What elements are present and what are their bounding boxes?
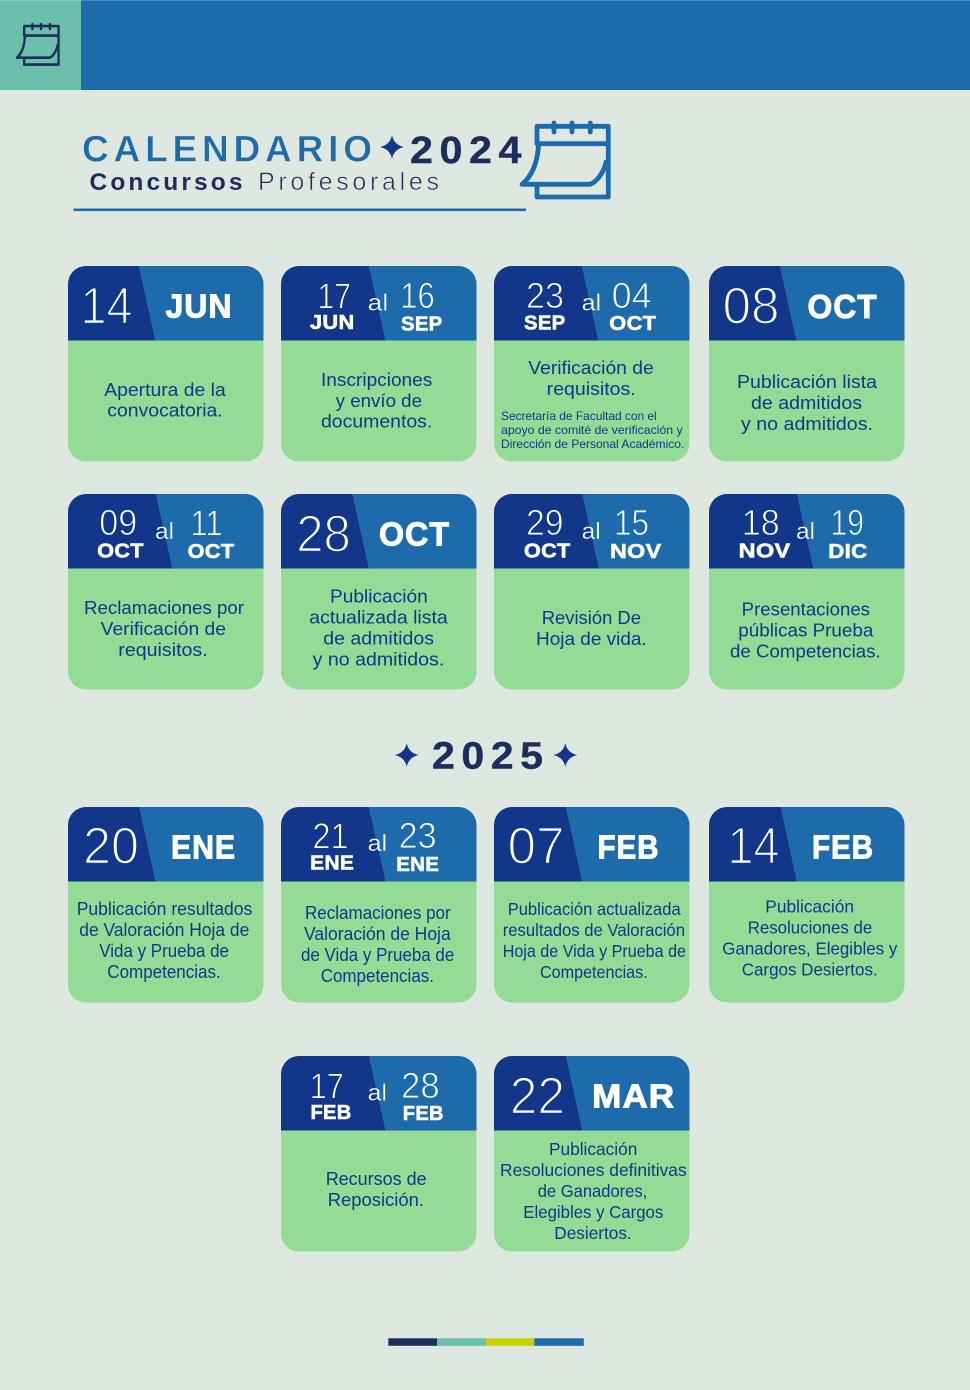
card: 29 OCT al 15 NOV: [494, 494, 690, 690]
date: 14: [80, 277, 132, 335]
description: Ganadores, Elegibles y: [722, 938, 898, 958]
date: 11: [190, 503, 222, 544]
date: al: [582, 518, 601, 544]
description: [309, 585, 448, 669]
date: [310, 1065, 444, 1125]
date: MAR: [592, 1078, 675, 1115]
date: [728, 818, 874, 876]
date: al: [796, 518, 815, 544]
card: 23 SEP al 04 OCT: [494, 266, 690, 462]
description: y no admitidos.: [313, 648, 444, 669]
description: resultados de Valoración: [503, 920, 685, 940]
date: al: [368, 290, 388, 316]
description: [730, 599, 881, 662]
date: OCT: [379, 517, 450, 554]
description: Apertura de la: [104, 379, 226, 400]
date: al: [368, 1080, 387, 1106]
date: al: [155, 518, 174, 544]
date: al: [368, 830, 387, 856]
description: de admitidos: [751, 392, 862, 413]
card: 07 FEB: [494, 807, 690, 1002]
description: [84, 597, 244, 660]
date: ENE: [171, 829, 236, 866]
description: Hoja de vida.: [536, 628, 647, 649]
date: SEP: [401, 312, 442, 335]
date: FEB: [812, 829, 874, 866]
description: Cargos Desiertos.: [742, 959, 878, 979]
description: Vida y Prueba de: [99, 940, 229, 961]
date: 21: [312, 815, 348, 856]
description: Competencias.: [107, 961, 221, 982]
date: [508, 818, 660, 876]
date: 19: [830, 502, 864, 543]
description: requisitos.: [547, 378, 636, 399]
date: [524, 502, 662, 563]
date: NOV: [739, 540, 791, 563]
description: Verificación de: [101, 618, 226, 639]
date: 18: [742, 502, 780, 543]
date: [722, 277, 878, 335]
date: 09: [99, 502, 137, 543]
description: documentos.: [321, 411, 432, 432]
description: [301, 902, 454, 986]
description: [104, 379, 226, 421]
description: Presentaciones: [742, 599, 870, 620]
date: 28: [401, 1065, 440, 1106]
date: [310, 275, 442, 335]
description: de admitidos: [323, 627, 434, 648]
description: Revisión De: [542, 607, 641, 628]
description: Publicación: [549, 1139, 637, 1159]
card: 28 OCT: [281, 494, 476, 690]
description: Publicación lista: [737, 371, 878, 392]
date: [739, 502, 868, 563]
description: Resoluciones de: [748, 917, 872, 937]
title block: [74, 123, 608, 211]
subtitle regular: Profesorales: [258, 168, 439, 196]
date: 17: [310, 1065, 344, 1106]
heading: 2024: 2024: [410, 130, 528, 172]
date: [510, 1067, 675, 1125]
description: [321, 369, 432, 432]
date: 14: [728, 818, 780, 876]
date: [80, 277, 232, 335]
description: de Valoración Hoja de: [79, 919, 249, 940]
description: convocatoria.: [107, 400, 223, 421]
date: NOV: [610, 540, 662, 563]
description: [500, 1139, 687, 1243]
card: 17 JUN al 16 SEP: [281, 266, 476, 462]
title underline: [74, 208, 526, 211]
description: Verificación de: [528, 357, 654, 378]
description: Reclamaciones por: [305, 902, 451, 923]
date: 15: [614, 502, 649, 543]
date: 08: [722, 277, 780, 335]
date: 28: [296, 506, 351, 564]
date: [83, 817, 236, 875]
date: SEP: [524, 311, 566, 334]
description: de Vida y Prueba de: [301, 944, 454, 965]
description: de Ganadores,: [538, 1181, 647, 1201]
date: 16: [400, 275, 435, 316]
date: JUN: [310, 311, 354, 334]
date: ENE: [310, 851, 354, 874]
description: y no admitidos.: [741, 413, 873, 434]
description: Valoración de Hoja: [304, 923, 451, 944]
subtitle bold: Concursos: [90, 169, 242, 196]
description: Competencias.: [540, 962, 648, 982]
date: OCT: [524, 540, 571, 563]
description: [326, 1168, 427, 1210]
description: Publicación resultados: [77, 898, 252, 919]
date: ENE: [396, 853, 439, 876]
card: 14 JUN: [68, 266, 264, 462]
card: 14 FEB: [709, 807, 904, 1002]
description: públicas Prueba: [738, 620, 874, 641]
description: [722, 896, 898, 979]
date: al: [582, 290, 601, 316]
icon: small calendar: [17, 24, 59, 65]
description: Elegibles y Cargos: [523, 1202, 664, 1222]
description: Competencias.: [321, 965, 434, 986]
date: OCT: [609, 312, 656, 335]
date: 22: [510, 1067, 565, 1125]
description: Publicación: [765, 896, 854, 916]
description: [77, 898, 252, 982]
date: [524, 275, 656, 335]
year text: 2025: [432, 735, 550, 777]
description: requisitos.: [118, 639, 208, 660]
icon: star right: [553, 743, 577, 767]
card: 17 FEB al 28 FEB: [281, 1056, 476, 1252]
date: [310, 815, 439, 876]
description: [501, 357, 684, 451]
date: 17: [318, 275, 351, 316]
description: Publicación actualizada: [508, 899, 681, 919]
date: 20: [83, 817, 139, 875]
card: 18 NOV al 19 DIC: [709, 494, 904, 690]
footer colour bar: [388, 1338, 584, 1346]
date: 04: [612, 275, 652, 316]
description: de Competencias.: [730, 641, 881, 662]
description: Publicación: [330, 585, 428, 606]
card: 09 OCT al 11 OCT: [68, 494, 264, 690]
date: OCT: [808, 289, 878, 326]
card: 22 MAR: [494, 1056, 690, 1252]
date: JUN: [166, 289, 232, 326]
description: Hoja de Vida y Prueba de: [503, 941, 686, 961]
description: [536, 607, 647, 649]
card: 08 OCT: [709, 266, 904, 462]
description: Secretaría de Facultad con el: [501, 409, 657, 423]
description: Dirección de Personal Académico.: [501, 437, 684, 451]
date: 23: [399, 815, 437, 856]
top banner: [0, 0, 970, 90]
description: [503, 899, 686, 982]
date: 23: [526, 275, 564, 316]
date: FEB: [310, 1101, 352, 1124]
date: 07: [508, 818, 564, 876]
date: DIC: [828, 540, 868, 563]
description: Recursos de: [326, 1168, 427, 1189]
description: apoyo de comité de verificación y: [501, 423, 683, 437]
date: 29: [526, 502, 564, 543]
date: OCT: [188, 540, 235, 563]
date: FEB: [403, 1102, 444, 1125]
description: Reclamaciones por: [84, 597, 244, 618]
date: FEB: [598, 829, 660, 866]
icon: star: [380, 135, 404, 159]
description: [737, 371, 878, 434]
description: Inscripciones: [321, 369, 432, 390]
description: Desiertos.: [554, 1223, 632, 1243]
heading: 2025: [395, 735, 577, 777]
date: OCT: [97, 540, 144, 563]
description: y envío de: [336, 390, 422, 411]
description: Resoluciones definitivas: [500, 1160, 687, 1180]
heading: calendario: CALENDARIO: [82, 128, 372, 170]
date: [97, 502, 235, 563]
description: Reposición.: [328, 1189, 424, 1210]
card: 21 ENE al 23 ENE: [281, 807, 476, 1002]
description: actualizada lista: [309, 606, 448, 627]
card: 20 ENE: [68, 807, 264, 1002]
icon: star left: [395, 743, 419, 767]
date: [296, 506, 450, 564]
icon: large calendar: [522, 123, 608, 197]
